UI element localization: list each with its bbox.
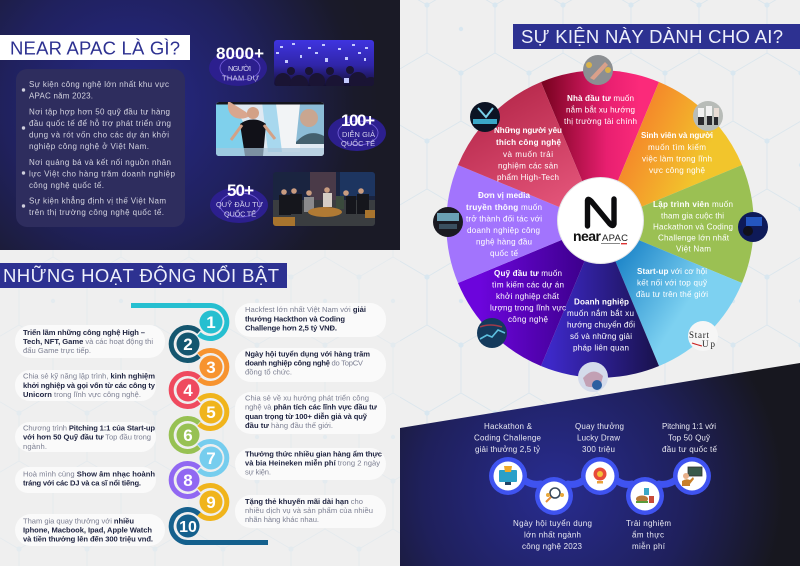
panel: intro text: nghiệp công nghệ ở Việt Nam. — [29, 142, 149, 151]
panel: intro text: Sự kiện khẳng định vị thế Việt Nam — [29, 196, 166, 206]
highlight: hackathon: Hackathon & — [484, 422, 533, 431]
spiral ring 5: 5 — [206, 403, 216, 422]
spiral ring 4 — [171, 374, 200, 406]
label: funds — [490, 269, 566, 324]
highlight: job fair — [513, 477, 592, 551]
icon: enterprise photo — [578, 362, 608, 392]
label: tech lovers — [494, 126, 562, 182]
callout 5: đầu tư hàng đầu thế giới. — [245, 421, 333, 430]
spiral ring 9: 9 — [206, 493, 216, 512]
callout 2: Tech, NFT, Game và các hoạt động thi — [23, 337, 153, 346]
photo: panel discussion — [273, 172, 375, 226]
label: enterprises: pháp liên quan — [573, 344, 629, 352]
label: developers — [653, 200, 733, 254]
callout 3: Ngày hội tuyển dụng với hàng trăm — [245, 350, 370, 358]
icon: media photo — [433, 207, 463, 237]
panel: intro text: APAC năm 2023. — [29, 92, 93, 100]
spiral ring 4: 4 — [183, 381, 193, 400]
heading: su kien nay danh cho ai: SỰ KIỆN NÀY DÀNH CHO AI? — [521, 26, 783, 47]
panel: intro text: trên thị trường công nghệ quốc tế. — [29, 208, 164, 217]
stat: 50+ investment funds: QUỐC TẾ — [224, 208, 256, 218]
highlight: food: miễn phí — [632, 542, 666, 551]
label: funds: Quỹ đầu tư muốn — [494, 269, 562, 278]
stat: 100+ speakers: DIỄN GIẢ — [342, 130, 375, 139]
label: students: Sinh viên và người — [641, 131, 713, 140]
label: media: truyền thông muốn — [466, 203, 542, 212]
callout 7: và bia Heineken miễn phí trong 2 ngày — [245, 458, 380, 468]
highlight: lucky draw: 300 triệu — [582, 445, 615, 454]
highlight: pitching: Pitching 1:1 với — [662, 422, 716, 431]
highlight: lucky draw: Lucky Draw — [577, 434, 620, 442]
logo: near apac: near — [573, 228, 602, 244]
spiral ring 1 — [131, 306, 227, 338]
label: enterprises — [567, 298, 635, 352]
callout 5: nghệ và phân tích các lĩnh vực đầu tư — [245, 402, 378, 412]
spiral ring 8 — [171, 464, 200, 496]
label: tech lovers: Những người yêu — [494, 126, 562, 135]
spiral ring 6: 6 — [183, 426, 193, 445]
callout 4: khởi nghiệp và gọi vốn từ các công ty — [23, 381, 156, 390]
callout 6 — [15, 422, 156, 452]
callout 8 — [15, 467, 156, 493]
icon: presenter board — [682, 467, 702, 486]
label: investors: Nhà đầu tư muốn — [567, 94, 634, 103]
label: enterprises: muốn nắm bắt xu — [567, 309, 634, 318]
callout 7 — [235, 448, 386, 480]
label: tech lovers: và muốn trải — [503, 150, 553, 159]
highlight: food: Trải nghiệm — [626, 519, 671, 528]
callout 4: Unicorn trong lĩnh vực công nghệ. — [23, 390, 141, 399]
label: start-ups: Start-up với cơ hội — [637, 267, 707, 276]
wheel sector labels — [466, 94, 733, 352]
sector: start-ups — [600, 224, 742, 366]
sector: investors — [541, 70, 659, 224]
callout 4: Chia sẻ kỹ năng lập trình, kinh nghiệm — [23, 372, 155, 380]
callout 6: Chương trình Pitching 1:1 của Start-up — [23, 424, 155, 432]
highlight: job fair: lớn nhất ngành — [524, 530, 581, 540]
spiral ring 10: 10 — [179, 519, 197, 536]
right activity callouts — [235, 303, 386, 528]
callout 4 — [15, 370, 156, 401]
highlight: hackathon: giải thưởng 2,5 tỷ — [475, 445, 540, 454]
highlight: food — [626, 477, 671, 551]
label: funds: công nghệ — [508, 315, 548, 324]
photo: conference crowd — [274, 40, 374, 86]
panel: intro text: lực Việt cho hàng trăm doanh nghiệp — [29, 170, 176, 178]
callout 6: với hơn 50 Quỹ đầu tư Top đầu trong — [23, 432, 151, 442]
callout 1: thưởng Hackthon và Coding — [245, 314, 345, 324]
label: developers: Challenge lớn nhất — [658, 234, 730, 242]
icon: fund chart photo — [477, 318, 507, 348]
icon: start up sketch: Up — [702, 339, 716, 349]
highlight: lucky draw — [575, 422, 624, 495]
callout 7: Thưởng thức nhiều gian hàng ẩm thực — [245, 450, 382, 458]
label: funds: lượng trong lĩnh vực — [490, 304, 566, 312]
spiral ring 7 — [199, 442, 227, 475]
callout 1: Challenge hơn 2,5 tỷ VNĐ. — [245, 324, 337, 332]
panel: near apac intro background — [0, 0, 400, 250]
callout 3 — [235, 348, 386, 382]
panel: intro text: đầu quốc tế để hỗ trợ phát triển ứng — [29, 119, 171, 128]
label: developers: Lập trình viên muốn — [653, 200, 733, 209]
highlight: pitching: Top 50 Quỹ — [668, 434, 710, 442]
highlight: hackathon — [474, 422, 542, 495]
stat: 100+ speakers: QUỐC TẾ — [341, 138, 375, 148]
label: students: muốn tìm kiếm — [648, 143, 706, 152]
icon: prize wheel — [594, 468, 606, 484]
panel: highlights background — [400, 363, 800, 566]
label: tech lovers: nghiệm các sản — [498, 162, 558, 170]
stat: 8000+ attendees: NGƯỜI — [228, 64, 251, 73]
icon: tech lover photo — [470, 102, 500, 132]
label: tech lovers: phẩm High-Tech — [497, 173, 559, 182]
stat: 100+ speakers: 100+ — [341, 111, 375, 130]
label: enterprises: Doanh nghiệp — [574, 298, 629, 306]
logo: near apac — [558, 178, 644, 264]
stat: 8000+ attendees: 8000+ — [216, 44, 264, 63]
label: start-ups: đầu tư trên thế giới — [636, 290, 708, 299]
callout 10: và tiền thưởng lên đến 300 triệu vnđ. — [23, 534, 153, 544]
spiral ring 2: 2 — [183, 335, 193, 354]
label: investors: nắm bắt xu hướng — [566, 106, 635, 114]
heading: hoat dong noi bat: NHỮNG HOẠT ĐỘNG NỔI BẬT — [3, 265, 279, 286]
label: investors — [564, 94, 637, 126]
stat: 50+ investment funds: QUỸ ĐẦU TƯ — [216, 199, 263, 209]
sector: students — [600, 82, 742, 224]
highlight: hackathon: Coding Challenge — [474, 434, 542, 442]
left activity callouts — [15, 325, 165, 546]
label: students: việc làm trong lĩnh — [642, 154, 712, 164]
label: start-ups — [636, 267, 708, 299]
callout 8: Hoà mình cùng Show âm nhạc hoành — [23, 470, 155, 478]
spiral ring 5 — [199, 396, 227, 428]
callout 10: Iphone, Macbook, Ipad, Apple Watch — [23, 526, 152, 534]
spiral ring 3 — [199, 350, 227, 384]
sector: enterprises — [541, 224, 659, 378]
callout 9: nhiều dịch vụ và sản phẩm của nhiều — [245, 506, 373, 515]
callout 10 — [15, 514, 165, 546]
icon: start up sketch — [688, 321, 718, 351]
spiral ring 9 — [199, 486, 227, 518]
callout 2 — [15, 325, 165, 358]
callout 1: Hackfest lớn nhất Việt Nam với giải — [245, 305, 366, 314]
label: funds: khởi nghiệp chất — [496, 292, 560, 301]
spiral ring 1: 1 — [206, 313, 216, 332]
panel: intro text: Nơi tập hợp hơn 50 quỹ đầu tư hàng — [29, 108, 170, 116]
label: enterprises: số và những giải — [570, 332, 632, 341]
bullet list markers — [22, 88, 25, 208]
label: developers: Hackathon và Coding — [653, 222, 733, 232]
label: media: quốc tế — [490, 249, 518, 258]
callout 6: ngành. — [23, 442, 47, 451]
panel: intro text: Sự kiện công nghệ lớn nhất khu vực — [29, 80, 169, 89]
label: media: trở thành đối tác với — [466, 214, 542, 224]
panel: intro text — [16, 69, 185, 227]
chain connector — [522, 478, 678, 484]
sector: funds — [458, 224, 600, 366]
spiral ring 10 — [171, 510, 268, 543]
callout 3: đồng tổ chức. — [245, 368, 292, 376]
callout 2: đấu Game trực tiếp. — [23, 346, 91, 355]
callout 9: nhãn hàng khác nhau. — [245, 515, 319, 524]
sector: tech lovers — [458, 82, 600, 224]
highlight: pitching: đầu tư quốc tế — [662, 445, 718, 454]
label: funds: tìm kiếm các dự án — [492, 280, 564, 290]
icon: burger and drink — [636, 488, 654, 503]
label: media: nghệ hàng đầu — [476, 238, 532, 246]
callout 9: Tặng thẻ khuyến mãi dài hạn cho — [245, 497, 363, 506]
callout 5: quan trọng từ 100+ diễn giả và quỹ — [245, 412, 368, 421]
label: enterprises: hướng chuyển đổi — [567, 320, 635, 330]
label: media: Đơn vị media — [478, 191, 530, 200]
label: students — [641, 131, 713, 175]
sector: media — [446, 165, 600, 283]
label: developers: Việt Nam — [676, 244, 711, 254]
callout 5: Chia sẻ về xu hướng phát triển công — [245, 394, 369, 402]
logo: near apac: APAC — [602, 233, 628, 244]
icon: trophy monitor — [499, 466, 517, 485]
icon: start up sketch: Start — [689, 330, 709, 340]
icon: students photo — [693, 101, 723, 131]
stat: 50+ investment funds: 50+ — [227, 181, 254, 200]
label: media: doanh nghiệp công — [467, 226, 540, 235]
callout 1 — [235, 303, 386, 337]
spiral ring 8: 8 — [183, 471, 193, 490]
callout 10: Tham gia quay thưởng với nhiều — [23, 516, 134, 526]
activities spiral timeline — [131, 306, 268, 543]
panel: intro text: Nơi quảng bá và kết nối nguồn nhân — [29, 158, 171, 167]
highlight: food: ẩm thực — [632, 530, 664, 540]
highlight: job fair: công nghệ 2023 — [522, 542, 583, 551]
wheel: eight audience sectors — [446, 70, 754, 378]
stat: 50+ investment funds — [210, 181, 268, 223]
photo: keynote speaker on stage — [216, 102, 324, 156]
stat: 8000+ attendees: THAM DỰ — [222, 74, 259, 82]
label: start-ups: kết nối với top quỹ — [637, 278, 708, 288]
label: investors: thị trường tài chính — [564, 117, 637, 126]
spiral ring 7: 7 — [206, 449, 216, 468]
stat: 8000+ attendees — [209, 44, 267, 86]
spiral ring 3: 3 — [206, 358, 216, 377]
label: students: vực công nghệ — [649, 166, 705, 175]
label: developers: tham gia cuộc thi — [661, 212, 724, 220]
callout 8: tráng với các DJ và ca sĩ nổi tiếng. — [23, 478, 141, 488]
spiral ring 2 — [171, 328, 200, 360]
panel: intro text: công nghệ quốc tế. — [29, 181, 104, 190]
icon: investor photo — [583, 55, 613, 85]
callout 2: Triển lãm những công nghệ High – — [23, 328, 145, 337]
label: media — [466, 191, 542, 258]
panel: intro text: dụng và rót vốn cho các dự án khởi — [29, 130, 169, 140]
callout 9 — [235, 495, 386, 528]
spiral ring 6 — [171, 418, 200, 452]
icon: developer photo — [738, 212, 768, 242]
label: tech lovers: thích công nghệ — [496, 138, 561, 147]
stat: 100+ speakers — [328, 111, 386, 151]
sector: developers — [600, 165, 754, 283]
callout 7: sự kiện. — [245, 468, 271, 476]
heading: near apac la gi: NEAR APAC LÀ GÌ? — [10, 38, 180, 58]
callout 3: doanh nghiệp công nghệ do TopCV — [245, 358, 364, 368]
highlight: pitching — [662, 422, 718, 495]
icon: recruiting magnifier — [546, 488, 564, 502]
highlight: lucky draw: Quay thưởng — [575, 422, 624, 431]
highlight: job fair: Ngày hội tuyển dụng — [513, 519, 592, 528]
callout 5 — [235, 392, 386, 434]
